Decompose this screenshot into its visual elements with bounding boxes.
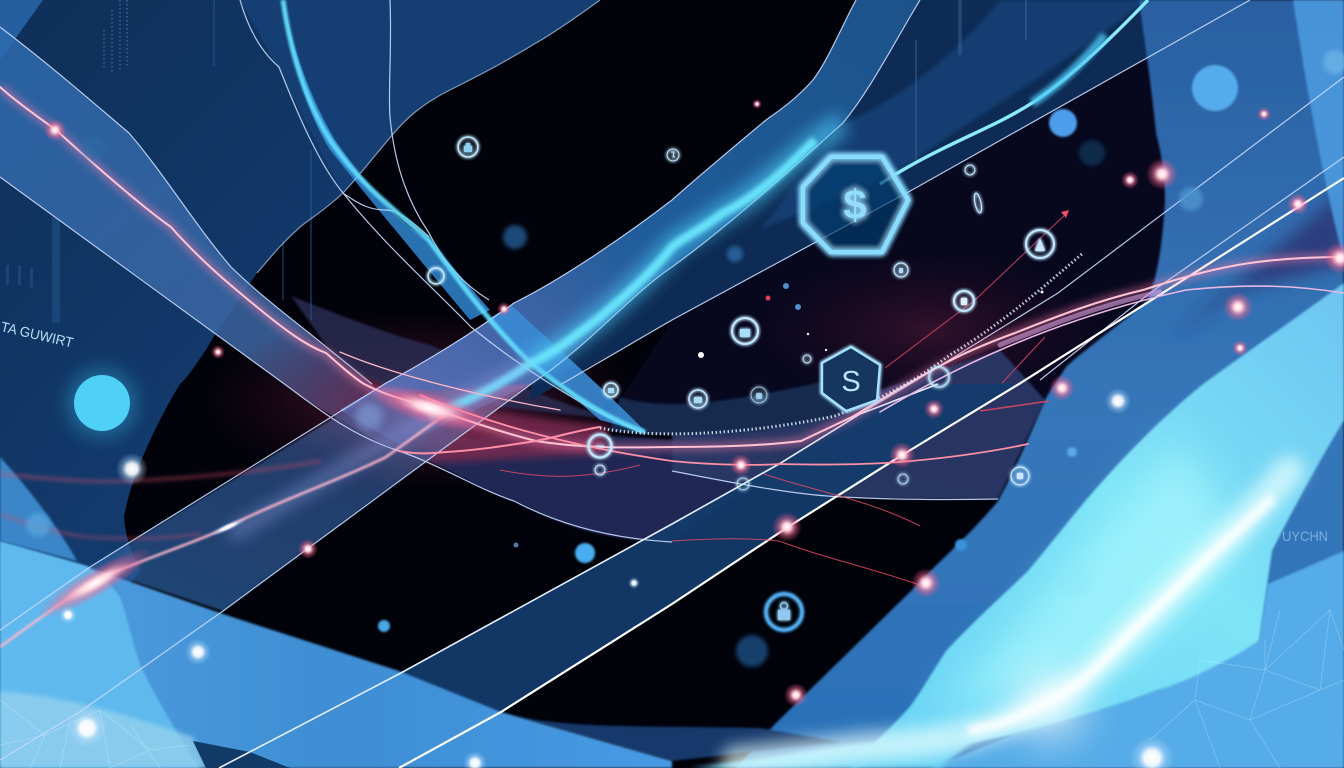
red lines: fine network traces: [500, 212, 1068, 587]
mesh: bottom right polygon network: [1150, 610, 1344, 768]
panel: dark band beside central ribbon: [531, 0, 1250, 400]
panel: crimson between the pink waves: [372, 392, 610, 462]
panel: left navy region: [0, 0, 600, 625]
glow: cyan central streak: [429, 140, 815, 417]
data columns: right faint bars: [915, 0, 1027, 160]
panel: cyan sheet: [852, 283, 1344, 768]
panel: swoosh under the pink waves: [399, 430, 779, 542]
glow: upper right cyan fat patch: [1032, 35, 1105, 103]
panel: bottom left dark sliver: [193, 741, 290, 768]
blurred red horizontal trails: [0, 461, 321, 538]
glowing particles: pink flares: [44, 99, 1344, 707]
glowing particles: white: [59, 352, 1174, 768]
panel: navy diagonal band two: [219, 384, 1019, 768]
data columns: left faint bars: [6, 0, 312, 323]
panel: bottom light streak: [690, 720, 1000, 768]
panel: central blue ribbon: [340, 0, 920, 445]
panel: crossing ribbon wedge: [487, 305, 647, 433]
panel: left translucent band: [0, 27, 520, 461]
glow: central pink flare: [368, 375, 492, 441]
bright line: white diagonal second: [219, 384, 938, 768]
label: right faint text: UYCHN: [1282, 528, 1328, 544]
panel: far right pale column: [1293, 0, 1344, 260]
panel: left corner light wedge: [0, 0, 43, 60]
mesh: bottom left polygon network: [0, 700, 190, 768]
glowing particles: tiny blue specks: [514, 283, 1044, 548]
panel: bottom left light blue: [0, 541, 672, 768]
glow: purple haze right: [750, 250, 1110, 410]
panel: left upper pale triangle: [0, 457, 77, 561]
glow: crimson haze: [200, 310, 640, 490]
panel: translucent diagonal band one: [90, 384, 531, 611]
panel: dark indigo field under the lines: [620, 0, 1250, 500]
panel: navy ribbon above the dotted track: [610, 375, 880, 435]
panel: bottom left paler wedge: [0, 541, 200, 768]
data columns: dotted top left traces: [104, 0, 127, 72]
glow: bright white bloom: [1016, 671, 1084, 739]
panel: dark purple wedge on right column: [1170, 190, 1344, 340]
panel: medium blue stripe above bright line: [760, 0, 1148, 230]
icon: small hexagon dollar: [822, 347, 880, 411]
icon: small hexagon dollar: S: [841, 366, 861, 398]
pink glow wave: [0, 87, 1344, 447]
panel: curved cyan ribbon body: [283, 0, 490, 320]
panel: upper left veil: [240, 0, 600, 193]
panel: right swoosh under the pink waves: [672, 350, 1045, 500]
glow: purple tail of central streak: [230, 365, 530, 535]
arrow: red trend tip: [1061, 210, 1069, 218]
bright line: bottom left rising streak: [0, 414, 446, 647]
glowing particles: large blue: [26, 50, 1344, 667]
glow: white streak core: [972, 500, 1270, 730]
label: left corner text: TA GUWIRT: [0, 318, 75, 351]
bright line: upper right cyan: [880, 0, 1148, 184]
panel: upper swoosh shade: [291, 296, 620, 420]
pink wave lines: [0, 87, 1344, 465]
dotted data track: [600, 253, 1083, 434]
panel: right column blue: [736, 0, 1344, 768]
icon: large hexagon dollar: [803, 157, 908, 252]
panel: bottom left pale crystal: [0, 691, 206, 768]
glow: small streak flare: [208, 515, 248, 539]
glow: white streak halo: [736, 471, 1289, 761]
bright line: white diagonal main: [399, 178, 1344, 768]
glow: cyan ribbon highlight: [283, 0, 645, 432]
icon: large hexagon dollar: $: [843, 181, 867, 228]
panel: lower right medium blue: [930, 551, 1344, 768]
glow: cyan central streak halo: [531, 123, 843, 363]
panel: bottom navy strip: [501, 712, 840, 761]
glow: bottom left flare: [31, 538, 159, 628]
glow: cyan brightening: [930, 440, 1240, 720]
icon: lock badges: [428, 137, 1054, 630]
